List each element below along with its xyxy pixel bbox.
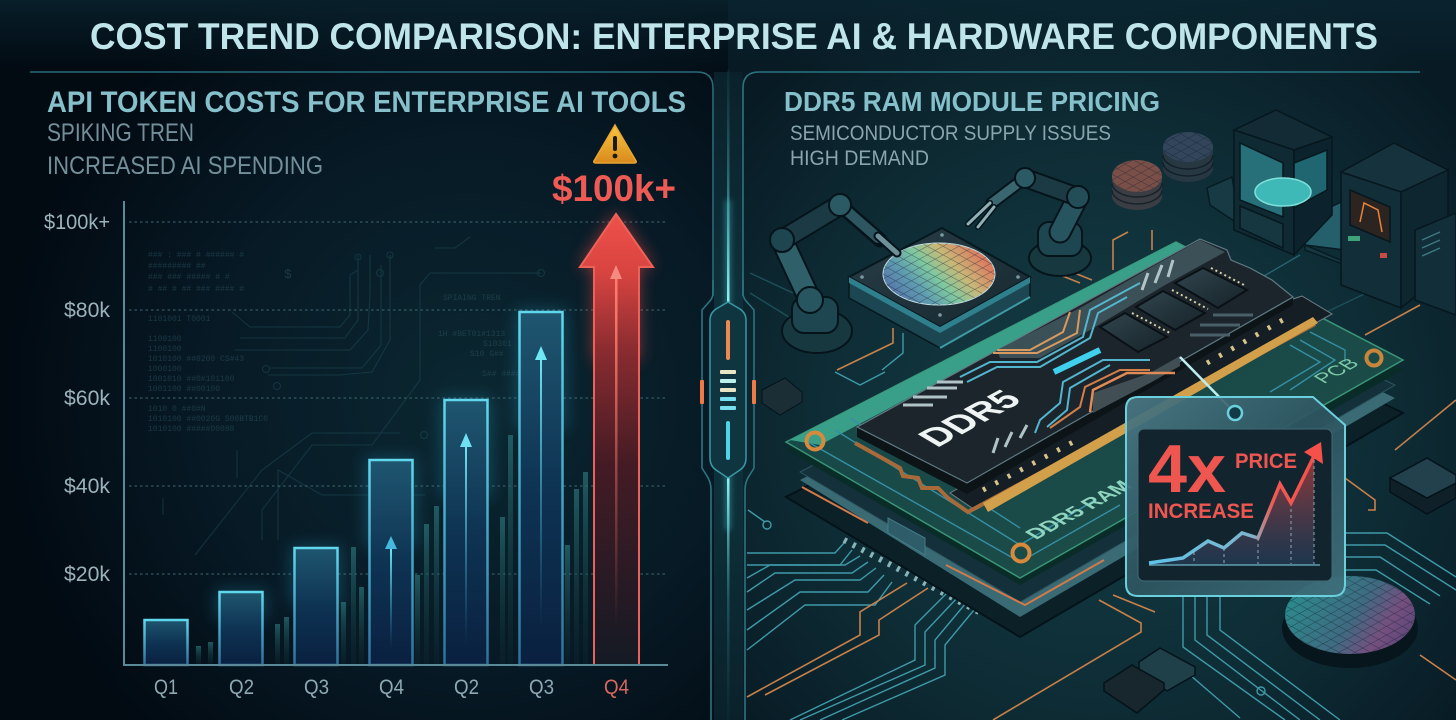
robot arm left [770,194,897,353]
tag inner panel [1138,429,1332,581]
subheading: high demand: HIGH DEMAND [790,147,929,170]
connector capsule outer [702,280,754,720]
lower right wafer [1282,576,1418,668]
wafer stack slate [1163,132,1213,182]
center divider connector [700,70,756,720]
faint background code text: 1010100 #####00088 [148,425,235,434]
glow bar on RAM [1054,350,1100,372]
inner red arrow [610,265,622,626]
PCB bright edge [790,242,1188,445]
title: COST TREND COMPARISON: ENTERPRISE AI & HARDWARE COMPONENTS [90,16,1378,57]
y axis labels: $60k [64,387,110,410]
y axis labels: $80k [64,299,110,322]
faint background bars [196,435,588,665]
x axis labels: Q4 [604,676,629,699]
faint background code text: ######### ## [148,262,206,271]
axes [124,201,668,665]
orange indicator [726,320,730,360]
faint background code text: ### ### ##### # # [148,273,230,282]
divider glow [725,200,731,530]
x axis labels: Q3 [529,676,554,699]
label: DDR5 on RAM: DDR5 [909,384,1030,452]
subheading: supply issues: SEMICONDUCTOR SUPPLY ISSUES [790,122,1111,145]
faint background code text: S10 G## [470,350,504,359]
RAM orange notch edge [855,324,1315,512]
bar Q2 [220,592,262,665]
memory chip 1 [1175,268,1247,308]
y axis labels: $20k [64,563,110,586]
faint background code text: 1H #BET01#1313 [438,330,505,339]
background: left half [0,0,728,720]
wafer platform [849,228,1030,348]
small arrow in Q3 bar [535,346,547,628]
RAM body [857,239,1293,494]
background: title band [0,0,1456,70]
small arrow in Q4 bar [385,536,397,648]
faint background code text: 1010100 ##0200 CS#43 [148,355,244,364]
memory chip 3 [1100,313,1167,352]
faint background code text: 1100100 [148,345,182,354]
x axis labels [154,676,629,699]
machine: control cabinet [1341,143,1448,308]
red arrow glow [579,213,654,360]
side orange right [752,380,756,404]
faint background code text: S## #### [482,370,521,379]
label: DDR5 RAM on PCB: DDR5 RAM [1021,478,1138,543]
y axis labels: $100k+ [44,211,110,234]
faint background code text: 1001010 ##0#101100 [148,375,235,384]
faint background code text: 1001100 ##00100 [148,385,220,394]
x axis labels: Q2 [229,676,254,699]
RAM lower board and connector [950,296,1332,510]
y axis labels: $40k [64,475,110,498]
callout: $100k+: $100k+ [552,168,676,209]
faint background code text: $ [284,267,292,282]
bar Q2 second [444,400,488,665]
conveyor [1207,177,1345,265]
robot arm right [968,168,1091,276]
RAM stick [855,239,1332,512]
callout: price: PRICE [1235,450,1297,473]
panel: DDR5 pricing [743,72,1456,720]
label: PCB: PCB [1309,356,1364,387]
wafer stack orange [1112,160,1162,210]
x axis labels: Q2 [454,676,479,699]
faint background code text: S10301 [483,340,512,349]
bar glows [215,309,567,619]
faint background code text: 1010 0 ##0#N [148,405,206,414]
pads [983,317,1288,490]
faint background code text: 1000100 [148,365,182,374]
base stack [786,280,1403,637]
divider lines [727,70,730,720]
bar Q3 [294,548,338,665]
background: right half [728,0,1456,720]
subheading: spiking trend: SPIKING TREN [47,119,194,147]
gold connector [983,317,1318,512]
machine: side rack [1415,213,1456,315]
callout: increase: INCREASE [1148,500,1254,523]
stack of indicators [720,370,736,410]
background: centre band [714,72,743,720]
price mini chart [1149,442,1323,565]
faint background code text: 1101001 T0001 [148,315,211,324]
x axis labels: Q4 [379,676,404,699]
connector capsule inner [710,302,746,478]
circuit traces, cyan [747,250,1456,720]
faint background code text: # ## # ## ### #### # [148,285,244,294]
chip pins [844,540,979,612]
red arrow [580,214,653,665]
heading: API token costs: API TOKEN COSTS FOR ENTERPRISE AI TOOLS [47,86,686,119]
x axis labels: Q1 [154,676,178,699]
callout: 4x: 4x [1148,431,1226,507]
bar Q1 [144,620,188,665]
green PCB board [786,242,1403,585]
bar Q4 [370,460,412,665]
price tag [1126,357,1345,596]
faint background code text [148,251,521,434]
tag hole [1228,406,1242,420]
y axis labels [44,211,110,586]
panel: API token costs [30,72,713,699]
faint background code text: 1010100 ##0020G S00BTB1C0 [148,415,268,424]
faint background code text: SPIAING TREN [443,294,501,303]
tag string [1180,357,1231,409]
bar Q3 second [520,312,562,665]
subheading: increased spending: INCREASED AI SPENDING [47,152,323,180]
heading: DDR5 pricing: DDR5 RAM MODULE PRICING [784,86,1160,117]
cyan indicator [726,421,730,460]
tag body [1126,397,1345,596]
x axis labels: Q3 [304,676,329,699]
circuit traces, orange [747,230,1456,720]
icon: warning triangle [594,125,636,163]
faint background code text: ### : ### # ###### # [148,251,244,260]
background circuit traces, left [163,237,544,555]
small chips bottom [1104,648,1195,713]
machine: wafer chamber [1234,110,1332,255]
side orange left [700,380,704,404]
memory chip 2 [1136,291,1205,330]
faint background code text: 1100100 [148,335,182,344]
grid lines [129,222,668,574]
RAM traces [960,283,1175,433]
chip pins on RAM [1132,268,1246,333]
bar chart [144,213,654,665]
RAM stripes [903,260,1173,453]
small arrow in Q2 bar [460,433,472,645]
small chip left [762,378,802,415]
silver heat spreader [997,240,1225,358]
small chip right [1390,458,1456,514]
